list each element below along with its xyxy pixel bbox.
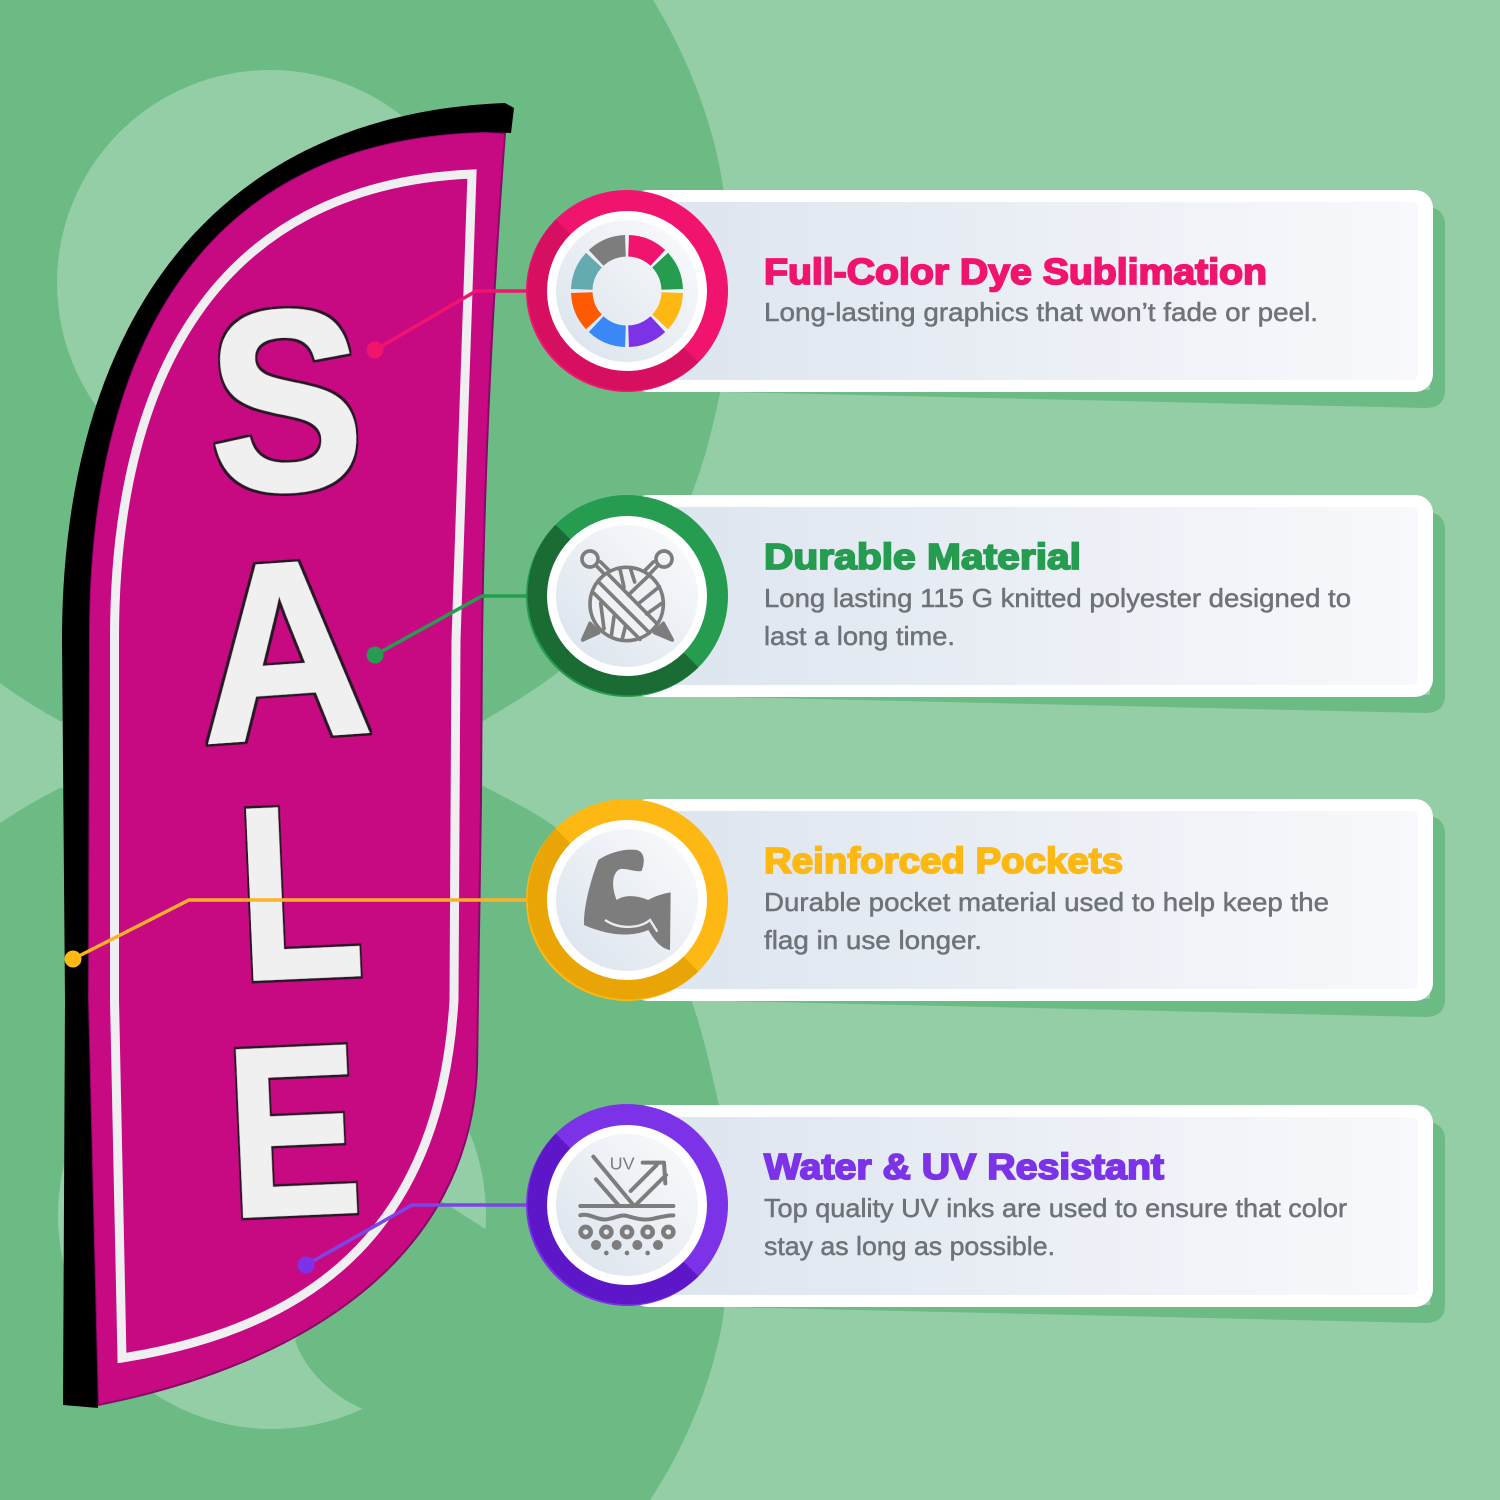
flag fabric [88,132,505,1405]
description: last a long time. [764,621,955,651]
description: Top quality UV inks are used to ensure that color [764,1193,1347,1223]
heading: Full-Color Dye Sublimation [764,251,1267,292]
heading: Water & UV Resistant [764,1146,1164,1187]
connector: green [366,596,530,664]
description: Long lasting 115 G knitted polyester designed to [764,583,1351,613]
description: stay as long as possible. [764,1231,1055,1261]
card shadow: dye sublimation [640,207,1445,408]
flag letter E: E [221,993,366,1268]
description [764,887,1329,955]
panel: durable material [526,495,1433,697]
heading: Reinforced Pockets [764,840,1123,881]
heading: Durable Material [764,536,1081,577]
card shadow: pockets [640,816,1445,1017]
flag letter L: L [231,752,368,1032]
description: flag in use longer. [764,925,982,955]
connector: purple [298,1205,530,1274]
card shadow: water uv [640,1122,1445,1323]
icon ring: pink [526,190,728,392]
icon: flexed arm [584,850,671,950]
panel: full-color dye sublimation [526,190,1433,392]
description [764,1193,1347,1261]
description: Long-lasting graphics that won’t fade or peel. [764,297,1318,327]
icon ring: green [526,495,728,697]
flag letter S: S [204,254,368,547]
icon: uv reflection on layers: UV [610,1153,635,1173]
description [764,583,1351,651]
flag white border [114,174,472,1358]
flag [62,103,514,1408]
icon ring: purple [526,1104,728,1306]
icon: uv reflection on layers [580,1153,673,1255]
flag black sleeve [62,103,514,1408]
card shadow: material [640,512,1445,713]
icon: yarn ball and needles [582,551,672,641]
panel: reinforced pockets [526,799,1433,1001]
icon ring: yellow [526,799,728,1001]
panel: water and uv resistant [526,1104,1433,1307]
flag letter A: A [188,504,378,797]
connector: pink [366,291,530,358]
description: Durable pocket material used to help keep the [764,887,1329,917]
icon: color wheel [560,224,694,358]
connector: yellow [64,900,530,968]
